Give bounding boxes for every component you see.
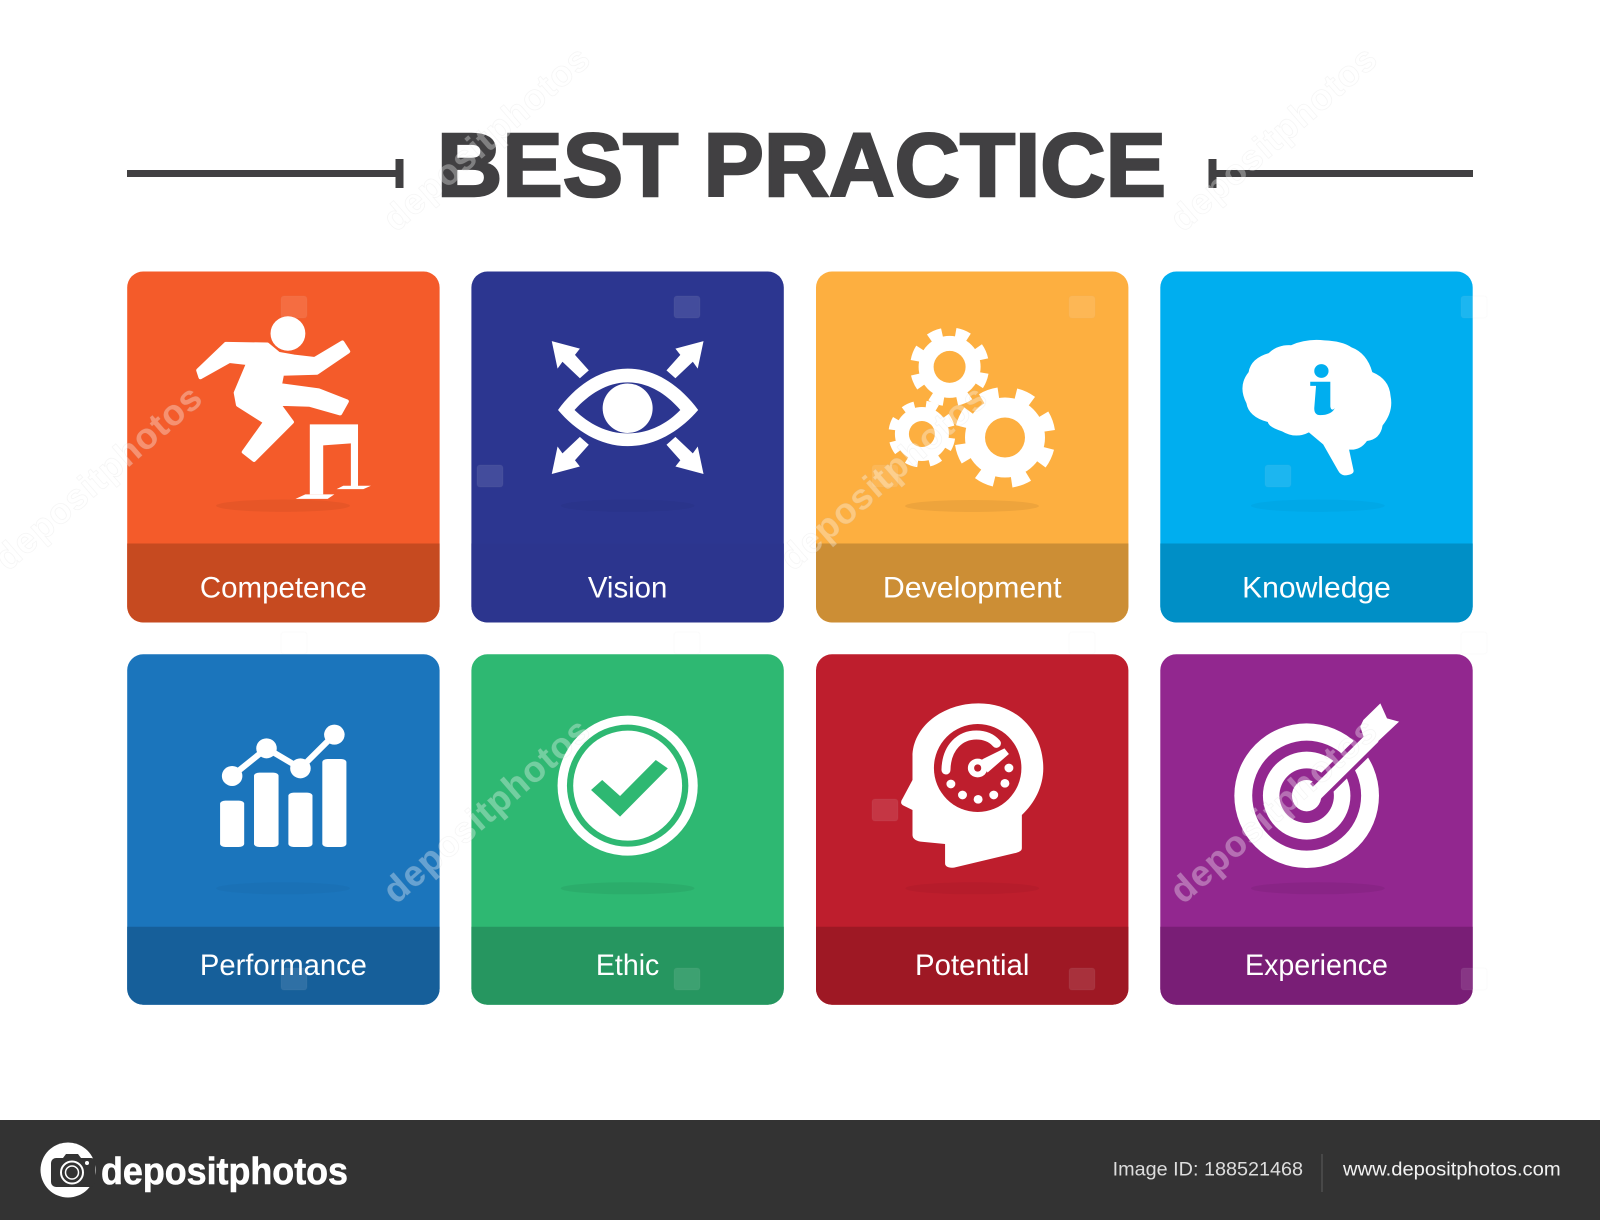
watermark overlay: depositphotos <box>1161 710 1384 911</box>
panel: performance <box>127 654 440 1005</box>
icon: check mark badge <box>558 716 698 894</box>
label: vision: Vision <box>588 572 667 604</box>
image id: Image ID: 188521468 <box>1113 1159 1303 1181</box>
watermark overlay: depositphotos <box>1161 38 1384 239</box>
left title rule <box>127 159 404 188</box>
panel: competence <box>127 272 440 622</box>
watermark camera marks <box>281 296 1487 990</box>
watermark overlay <box>0 38 1384 911</box>
icon: brain with info letter <box>1242 340 1391 512</box>
icon: runner jumping hurdle <box>198 316 371 512</box>
label: performance: Performance <box>200 949 367 982</box>
label: competence: Competence <box>200 572 367 604</box>
icon: eye with four arrows <box>552 341 704 512</box>
label: potential: Potential <box>915 949 1029 982</box>
footer bar <box>0 1120 1600 1220</box>
panel: ethic <box>471 654 784 1005</box>
label: experience: Experience <box>1245 949 1388 982</box>
label: ethic: Ethic <box>596 949 659 982</box>
footer divider <box>1322 1154 1323 1192</box>
shadow under gears <box>905 500 1039 512</box>
site url: www.depositphotos.com <box>1342 1159 1561 1181</box>
label: knowledge: Knowledge <box>1242 572 1391 604</box>
watermark overlay: depositphotos <box>374 38 597 239</box>
logo wordmark: depositphotos <box>101 1151 348 1193</box>
panel: experience <box>1160 654 1473 1005</box>
icon: three gears <box>888 326 1060 492</box>
title: BEST PRACTICE <box>437 116 1166 216</box>
label: development: Development <box>883 572 1062 604</box>
icon: target with arrow <box>1234 703 1399 894</box>
panel: vision <box>471 272 784 622</box>
watermark overlay: depositphotos <box>374 710 597 911</box>
watermark overlay: depositphotos <box>771 377 994 578</box>
right title rule <box>1208 159 1473 188</box>
panel: potential <box>816 654 1128 1005</box>
panel: knowledge <box>1160 272 1473 622</box>
panel: development <box>816 272 1128 622</box>
icon: bar chart with trend line <box>216 725 350 894</box>
icon: head with gauge <box>901 703 1043 894</box>
icon: camera logo <box>40 1142 96 1198</box>
